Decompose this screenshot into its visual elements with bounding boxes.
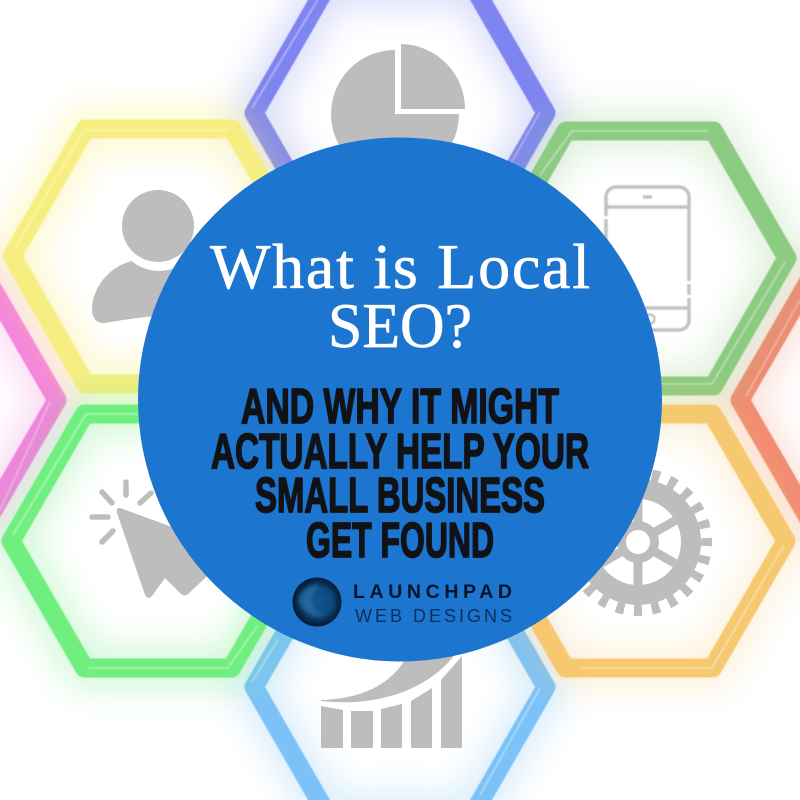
- logo: Launchpad Web Designs: [292, 578, 512, 626]
- icon: person: [92, 190, 230, 323]
- central blue circle: [138, 138, 662, 662]
- title: SEO?: [328, 290, 472, 361]
- hexagon: yellow (upper left) with person icon: [12, 129, 306, 384]
- icon: gear: [570, 474, 706, 610]
- logo wordmark: [353, 581, 512, 626]
- icon: pie chart: [331, 44, 465, 178]
- icon: bar chart with swoosh: [321, 650, 462, 748]
- title: What is Local: [210, 231, 590, 302]
- subtitle: SMALL BUSINESS: [255, 469, 545, 523]
- logo wordmark: WEB DESIGNS: [355, 606, 512, 626]
- icon: smartphone: [606, 187, 689, 330]
- hexagon: red (right edge): [740, 273, 800, 527]
- logo wordmark: LAUNCHPAD: [353, 581, 512, 603]
- title: [210, 231, 590, 361]
- hexagon: orange (lower right) with gear icon: [492, 414, 786, 668]
- subtitle: ACTUALLY HELP YOUR: [211, 425, 589, 479]
- hexagon: pink (left edge): [0, 273, 57, 527]
- subtitle: [211, 380, 589, 568]
- subtitle: GET FOUND: [306, 514, 494, 568]
- hexagon: violet (top) with pie chart icon: [252, 0, 546, 240]
- hexagon: green (upper right) with smartphone icon: [493, 131, 787, 386]
- hexagon: lime green (lower left) with cursor icon: [11, 414, 305, 668]
- icon: cursor click: [92, 482, 235, 598]
- hexagon: blue (bottom) with growth chart icon: [252, 560, 546, 800]
- icon: logo sphere: [292, 578, 342, 626]
- subtitle: AND WHY IT MIGHT: [241, 380, 559, 434]
